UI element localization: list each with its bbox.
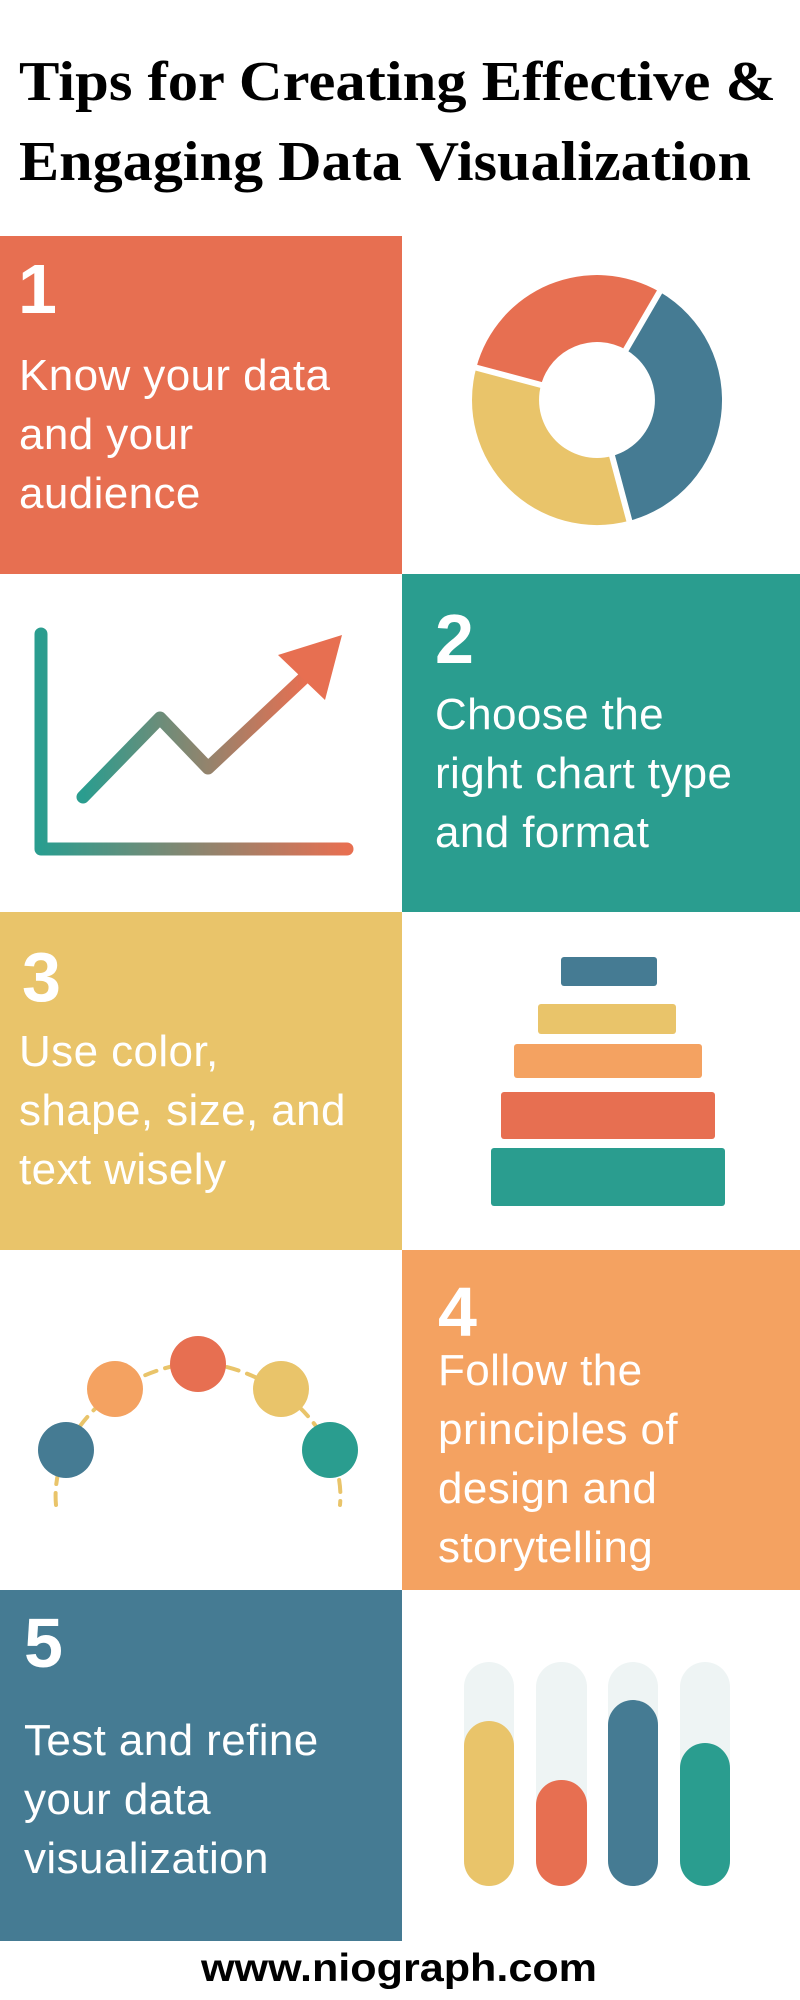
- text tip 3: shape, size, and: [19, 1086, 346, 1135]
- text tip 3: Use color,: [19, 1027, 219, 1076]
- text tip 2: right chart type: [435, 749, 732, 798]
- text tip 2: [435, 690, 732, 857]
- text tip 3: [19, 1027, 346, 1194]
- text tip 4: storytelling: [438, 1523, 653, 1572]
- text tip 5: [24, 1716, 319, 1883]
- text tip 4: Follow the: [438, 1346, 643, 1395]
- panel: tip 1: [0, 236, 402, 574]
- panel: tip 5: [0, 1590, 402, 1941]
- text tip 1: audience: [19, 469, 201, 518]
- text tip 1: Know your data: [19, 351, 330, 400]
- text tip 5: visualization: [24, 1834, 269, 1883]
- text tip 4: principles of: [438, 1405, 678, 1454]
- icon: donut chart: [472, 275, 722, 526]
- text tip 4: [438, 1346, 678, 1572]
- number 2: 2: [435, 600, 474, 678]
- footer url: www.niograph.com: [200, 1947, 597, 1990]
- text tip 3: text wisely: [19, 1145, 226, 1194]
- number 1: 1: [18, 250, 57, 328]
- text tip 2: Choose the: [435, 690, 664, 739]
- text tip 2: and format: [435, 808, 649, 857]
- text tip 4: design and: [438, 1464, 657, 1513]
- panel: tip 2: [402, 574, 800, 912]
- panel: tip 4: [402, 1250, 800, 1590]
- title: Tips for Creating Effective &: [19, 51, 776, 113]
- icon: line chart with arrow: [34, 628, 354, 856]
- number 5: 5: [24, 1604, 63, 1682]
- number 3: 3: [22, 938, 61, 1016]
- title: [19, 51, 776, 193]
- icon: stacked bars pyramid: [491, 957, 725, 1206]
- text tip 5: your data: [24, 1775, 211, 1824]
- panel: tip 3: [0, 912, 402, 1250]
- text tip 5: Test and refine: [24, 1716, 319, 1765]
- title: Engaging Data Visualization: [19, 131, 751, 193]
- number 4: 4: [438, 1273, 477, 1351]
- icon: connected dots arc: [38, 1336, 358, 1507]
- text tip 1: [19, 351, 330, 518]
- text tip 1: and your: [19, 410, 193, 459]
